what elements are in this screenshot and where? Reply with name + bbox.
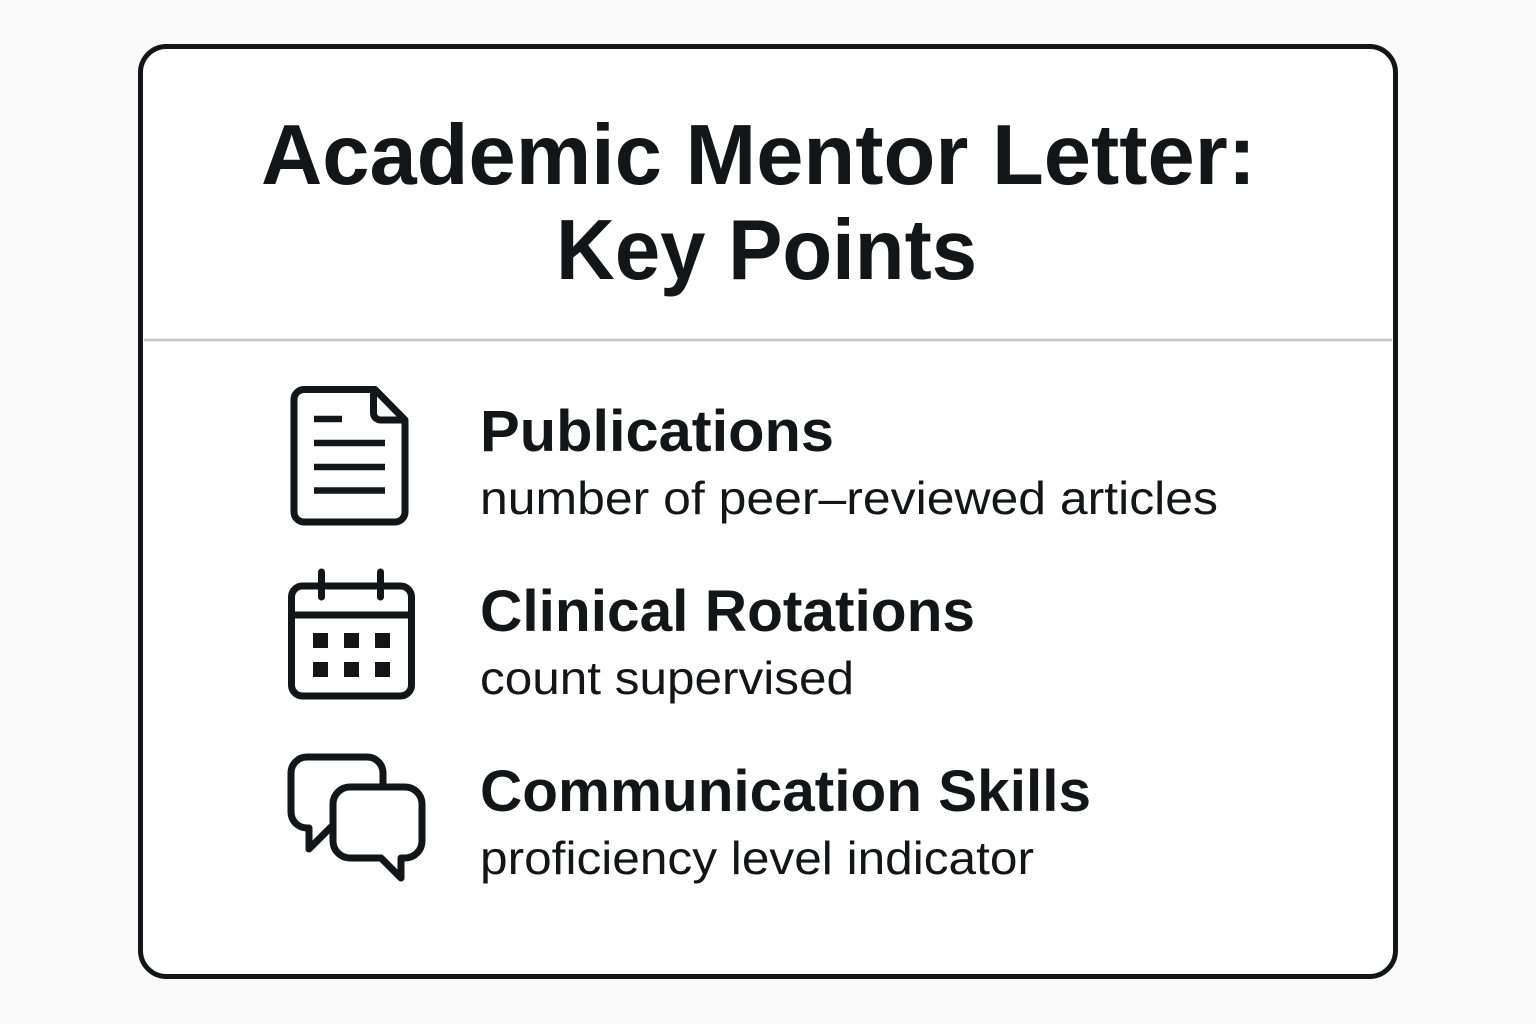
heading: clinical rotations: Clinical Rotations <box>480 579 975 644</box>
title <box>261 108 1256 298</box>
title: Key Points <box>556 203 977 298</box>
item: publications <box>294 390 1218 524</box>
panel: key points card <box>140 46 1396 976</box>
item: communication skills <box>291 757 1091 884</box>
description: clinical rotations: count supervised <box>480 652 854 704</box>
icon: speech bubbles <box>291 757 422 878</box>
heading: publications: Publications <box>480 399 834 464</box>
title: Academic Mentor Letter: <box>261 108 1256 203</box>
icon: calendar <box>291 572 412 696</box>
heading: communication skills: Communication Skills <box>480 759 1091 824</box>
item: clinical rotations <box>291 572 975 704</box>
description: publications: number of peer–reviewed articles <box>480 472 1218 524</box>
description: communication skills: proficiency level indicator <box>480 832 1034 884</box>
icon: document <box>294 390 405 522</box>
